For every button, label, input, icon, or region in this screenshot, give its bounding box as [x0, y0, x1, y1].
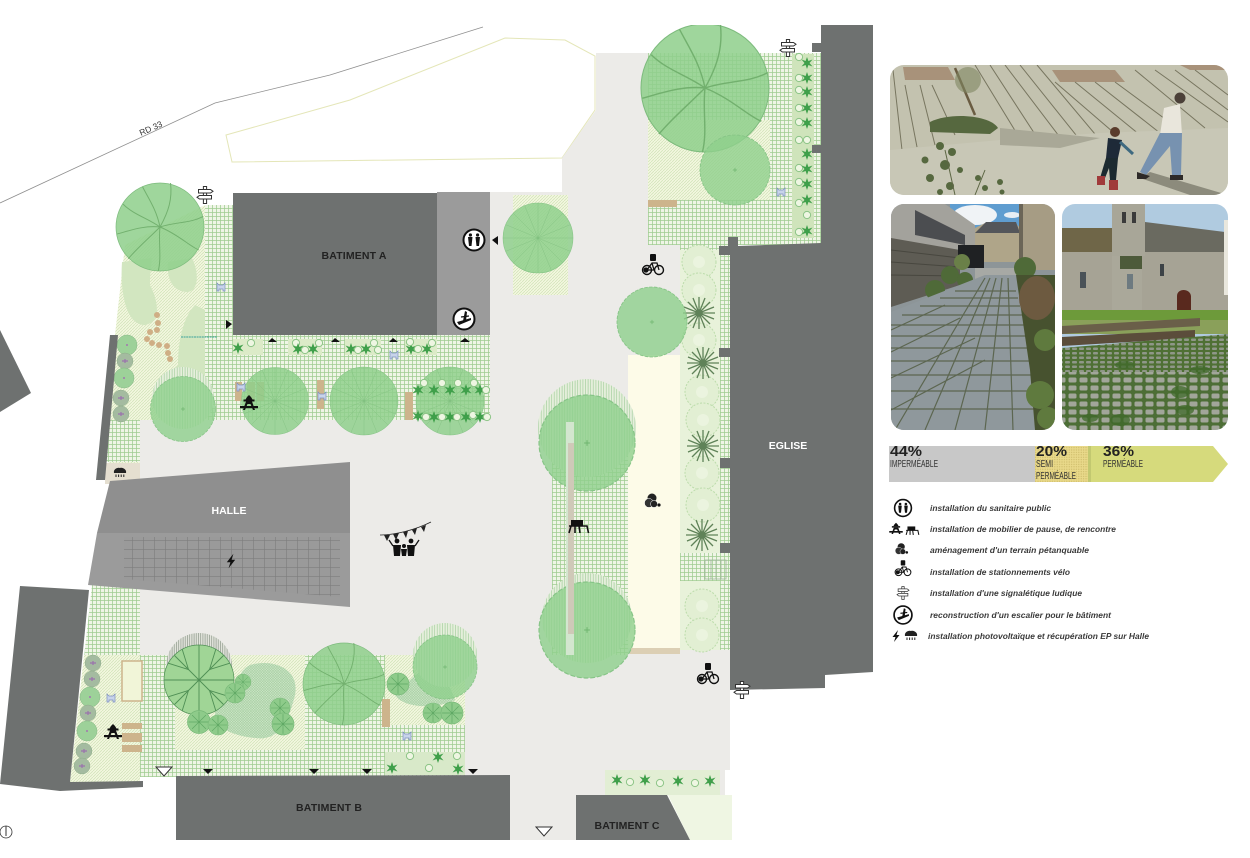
planted masses: [122, 258, 455, 738]
photo: skaters on striped paving: [890, 65, 1228, 195]
icon: rain collection: [114, 468, 126, 477]
icon: toilets: [464, 230, 484, 250]
central grid: [552, 420, 628, 655]
building: southwest: [0, 586, 143, 791]
segment: impermeable: 44%: [890, 443, 922, 460]
east planting strip plants: [682, 245, 720, 652]
grid beside Halle: [100, 420, 140, 462]
legend: signage: installation d'une signalétique ludique: [930, 588, 1082, 598]
central bench beam: [566, 422, 574, 655]
icon: bike north: [642, 254, 664, 274]
building: Halle: HALLE: [212, 505, 246, 517]
row tree 1: [242, 368, 308, 434]
west tree: [150, 376, 216, 442]
south meadow 2: [385, 655, 465, 725]
building: Batiment B: BATIMENT B: [296, 802, 362, 814]
photo: cobbled path: [891, 204, 1059, 430]
hatched tree crown: [166, 633, 232, 699]
steps: [705, 560, 726, 579]
north churchyard grid: [648, 53, 822, 245]
legend: bike parking: [895, 560, 1070, 577]
north churchyard meadow: [648, 120, 770, 200]
segment: semi permeable: 20%: [1036, 443, 1067, 460]
icon: signpost northwest: [197, 186, 213, 204]
lawn blob 1: [122, 258, 157, 325]
trees: [116, 24, 770, 787]
segment: semi permeable: SEMI: [1036, 459, 1053, 470]
wood wall: [891, 238, 960, 307]
building top left edge: [0, 330, 31, 412]
entrance markers: [203, 236, 498, 774]
south bed plants: [612, 774, 716, 787]
segment: semi permeable: PERMÉABLE: [1036, 469, 1076, 482]
icon: picnic south: [104, 724, 122, 739]
south shrub bed plants: [385, 751, 465, 775]
building: Batiment A: [233, 192, 490, 335]
segment: impermeable: IMPERMÉABLE: [890, 457, 938, 470]
site plan: [0, 24, 873, 840]
rain collection pad: [105, 463, 140, 484]
south grid: [140, 655, 465, 777]
corner lawn: [668, 795, 732, 840]
legend: petanque: [895, 543, 1089, 555]
icon: signpost north: [780, 40, 796, 56]
photo: church and grassed cobbles: [1062, 204, 1228, 430]
icon: stairs: [454, 308, 474, 330]
segment: permeable: 36%: [1103, 443, 1134, 460]
building: Batiment B: [176, 775, 510, 840]
east grid: [680, 245, 730, 650]
north small tree: [700, 135, 770, 205]
south meadow 1: [175, 655, 305, 750]
legend: bike parking: installation de stationnements vélo: [930, 567, 1070, 577]
entrance triangle south: [536, 827, 552, 836]
segment: permeable: [1091, 443, 1228, 482]
left building: [891, 204, 975, 250]
lawn blob 2: [168, 258, 197, 292]
east planting strip: [680, 250, 720, 650]
southwest garden: [70, 655, 140, 782]
legend: [889, 500, 1149, 642]
building: Batiment C: [576, 795, 690, 840]
south veined tree: [303, 643, 385, 725]
petanque court: [628, 355, 680, 648]
entrance triangle west: [156, 767, 172, 776]
child skater: [1097, 127, 1133, 190]
benches and planks: [122, 200, 680, 752]
row tree 3: [416, 367, 484, 435]
building: Eglise: [719, 25, 873, 690]
road RD 33: RD 33: [138, 119, 164, 138]
southeast tree: [413, 635, 477, 699]
planting on row tree 3: [412, 379, 491, 423]
ground far: [975, 268, 1016, 279]
garden beds and grass grids: [70, 53, 822, 840]
segment: semi permeable: [1035, 443, 1091, 482]
lawn blob 3: [157, 305, 205, 400]
road RD 33: [0, 27, 483, 203]
west garden: [108, 205, 205, 470]
legend: stairs: [894, 606, 1112, 624]
permeability bar: [889, 443, 1228, 482]
segment: permeable: PERMÉABLE: [1103, 457, 1143, 470]
icon: petanque: [644, 494, 661, 508]
right planting bed: [1016, 275, 1055, 430]
shrubs along Batiment A: [232, 338, 437, 355]
northwest tree: [116, 183, 204, 271]
legend: petanque: aménagement d'un terrain pétanquable: [930, 545, 1089, 555]
icon: signpost southeast: [734, 682, 750, 698]
north big tree: [641, 24, 769, 152]
seats: [107, 188, 785, 740]
icon: compass: [0, 826, 12, 838]
legend: photovoltaic and rainwater: installation photovoltaïque et récupération EP sur Halle: [928, 631, 1149, 641]
legend: street furniture: [889, 523, 1116, 535]
icon: festive gathering: [380, 522, 431, 556]
planned parcel outline: [226, 38, 595, 162]
south shrubs: [188, 673, 463, 735]
building: Batiment A: BATIMENT A: [322, 250, 387, 262]
legend: public toilets: [895, 500, 1051, 516]
hedge columns: [74, 335, 137, 774]
row tree 2: [330, 367, 398, 435]
east tree: [617, 287, 687, 357]
icon: bike south: [698, 663, 718, 684]
west grid: [205, 205, 490, 420]
car: [958, 245, 984, 268]
shrubs: [925, 254, 1036, 300]
hatched blob southeast: [395, 670, 455, 706]
segment: impermeable: [889, 443, 1035, 482]
south dark tree: [164, 645, 234, 715]
central tree south: [539, 582, 635, 678]
tiny annotation line: [181, 336, 217, 338]
icon: solar bolt: [227, 554, 235, 568]
adult skater: [1137, 92, 1186, 180]
building: wall strip: [96, 335, 118, 480]
southwest grid: [84, 585, 140, 657]
tree beside Batiment A: [503, 203, 573, 273]
plaza paving: [140, 53, 730, 840]
legend: stairs: reconstruction d'un escalier pour le bâtiment: [930, 610, 1112, 620]
legend: street furniture: installation de mobilier de pause, de rencontre: [930, 524, 1116, 534]
building: Batiment C: BATIMENT C: [594, 820, 660, 832]
north hedge strip: [792, 53, 814, 238]
legend: public toilets: installation du sanitaire public: [930, 503, 1051, 513]
right stone building: [1023, 204, 1055, 270]
shrub: [922, 116, 1004, 195]
icon: bench: [569, 520, 588, 533]
hatched blob south: [215, 663, 296, 738]
halo grid around tree: [513, 195, 568, 295]
house: [975, 222, 1020, 262]
icon: picnic west: [240, 395, 258, 410]
paved path: [891, 275, 1017, 430]
tree halos: [152, 367, 636, 687]
building: Halle: [88, 462, 350, 607]
central tree north: [539, 395, 635, 491]
legend: signage: [897, 587, 1082, 599]
south shrub bed: [605, 770, 720, 795]
building: Eglise: EGLISE: [769, 440, 807, 452]
stair grid: [680, 553, 730, 581]
stepping stones: [144, 312, 173, 362]
